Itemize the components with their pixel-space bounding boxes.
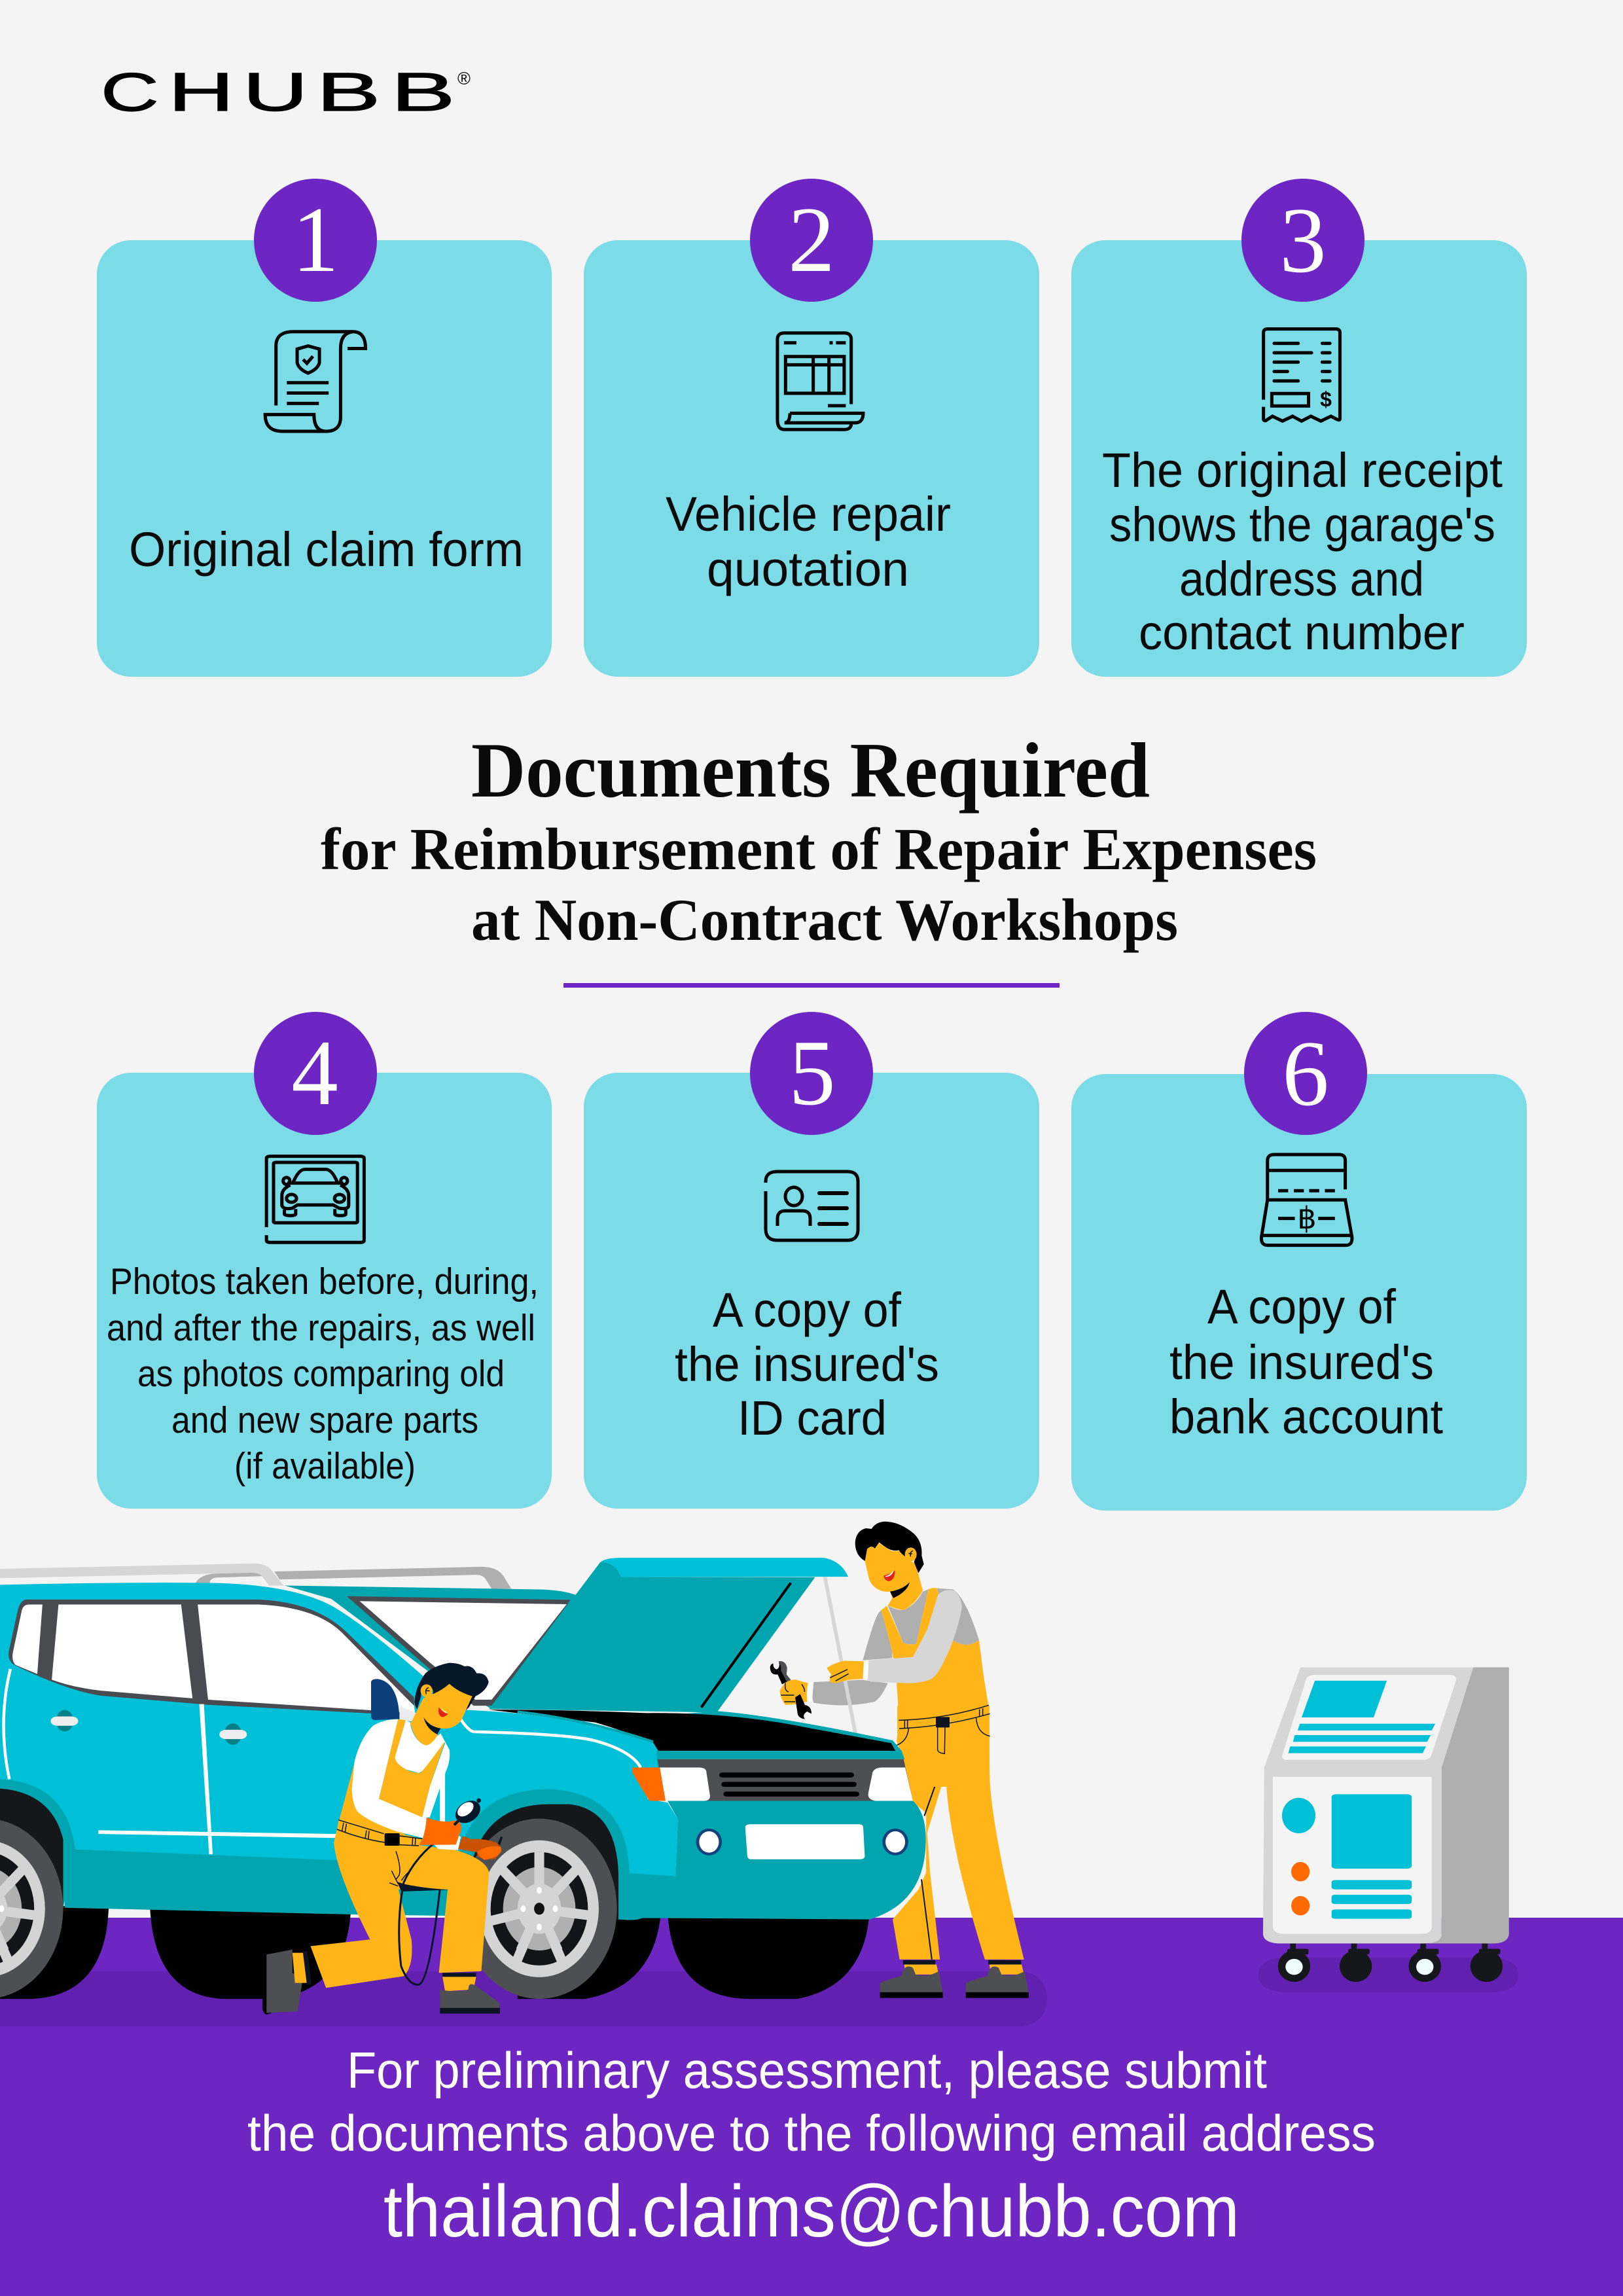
plate and fog lights xyxy=(745,1824,865,1859)
support rod xyxy=(823,1577,858,1738)
footer text: For preliminary assessment, please submit xyxy=(347,2041,1267,2099)
text: original claim form: Original claim form xyxy=(129,522,524,577)
logo: Chubb: C xyxy=(101,62,159,122)
casters xyxy=(1278,1943,1503,1982)
text: ID card copy: ID card xyxy=(738,1391,887,1445)
machine shadow xyxy=(1258,1958,1518,1992)
text: original receipt: shows the garage's xyxy=(1109,497,1495,552)
text: photos: and new spare parts xyxy=(171,1399,478,1441)
text: photos: Photos taken before, during, xyxy=(110,1261,539,1302)
number badge 1 xyxy=(254,179,377,302)
gloves xyxy=(434,1835,461,1850)
number badge 5 xyxy=(750,1012,873,1135)
text: ID card copy xyxy=(675,1283,939,1445)
ground shadow under car xyxy=(0,1971,1047,2026)
number badge 5: 5 xyxy=(789,1021,836,1124)
illustration: kneeling mechanic xyxy=(262,1663,503,2015)
logo: Chubb xyxy=(101,62,471,122)
bib xyxy=(379,1719,445,1818)
number badge 6 xyxy=(1244,1012,1367,1135)
machine panel xyxy=(1273,1777,1432,1934)
icon: receipt: $ xyxy=(1320,387,1332,411)
title: Documents Required xyxy=(471,726,1150,814)
text: ID card copy: A copy of xyxy=(713,1283,901,1337)
belt xyxy=(337,1820,422,1846)
legs and boots xyxy=(880,1706,1029,1998)
text: original receipt: The original receipt xyxy=(1102,443,1503,497)
icon: receipt xyxy=(1264,329,1340,421)
upper body and head xyxy=(337,1663,503,1892)
text: photos xyxy=(107,1261,539,1487)
text: photos: and after the repairs, as well xyxy=(107,1307,535,1349)
upper body and head xyxy=(770,1522,990,1787)
wheel arches xyxy=(0,1779,75,1908)
panel: document 4 xyxy=(97,1012,552,1509)
mirror xyxy=(371,1679,399,1720)
panel: document 6 xyxy=(1071,1012,1527,1511)
text: vehicle repair quotation: Vehicle repair xyxy=(666,487,951,541)
icon: insurance scroll xyxy=(265,332,366,431)
neck and face xyxy=(865,1543,923,1610)
machine body xyxy=(1442,1667,1509,1768)
icon: bank book xyxy=(1261,1155,1352,1246)
front end xyxy=(618,1801,926,1920)
logo: Chubb: U xyxy=(243,62,308,122)
wheels xyxy=(0,1819,63,1999)
number badge 3 xyxy=(1241,179,1364,302)
footer text: thailand.claims@chubb.com xyxy=(383,2170,1240,2252)
panel: document 1 xyxy=(97,179,552,677)
illustration: standing mechanic xyxy=(770,1522,1029,1998)
text: original receipt: address and xyxy=(1179,552,1424,606)
illustration: car xyxy=(0,1558,926,1999)
windows xyxy=(9,1600,414,1715)
number badge 3: 3 xyxy=(1279,188,1327,292)
body lines xyxy=(98,1704,336,1854)
number badge 6: 6 xyxy=(1282,1022,1329,1125)
text: vehicle repair quotation: quotation xyxy=(707,542,909,596)
title xyxy=(321,726,1317,988)
number badge 1: 1 xyxy=(292,188,339,291)
footer band xyxy=(0,1918,1623,2296)
text: bank account copy: bank account xyxy=(1169,1390,1443,1444)
text: bank account copy xyxy=(1169,1280,1443,1444)
number badge 2 xyxy=(750,179,873,302)
front arm xyxy=(867,1590,962,1683)
text: bank account copy: A copy of xyxy=(1207,1280,1396,1334)
text: original receipt: contact number xyxy=(1139,605,1465,660)
number badge 4 xyxy=(254,1012,377,1135)
headlights xyxy=(632,1768,666,1801)
footer text xyxy=(247,2041,1376,2252)
gauge xyxy=(454,1818,461,1825)
car body xyxy=(0,1583,678,1876)
hood xyxy=(489,1562,815,1712)
tyres xyxy=(0,1906,109,1999)
text: photos: (if available) xyxy=(234,1445,416,1487)
lower body band xyxy=(63,1848,629,1920)
number badge 4: 4 xyxy=(291,1021,338,1124)
wrench hand xyxy=(770,1661,791,1684)
door handles xyxy=(56,1710,73,1731)
text: bank account copy: the insured's xyxy=(1169,1335,1434,1390)
hair xyxy=(414,1663,489,1710)
panel: document 5 xyxy=(584,1012,1039,1509)
shirt xyxy=(352,1719,427,1838)
icon: repair quotation xyxy=(777,333,863,429)
logo: Chubb: ® xyxy=(457,69,471,88)
face xyxy=(410,1684,473,1746)
logo: Chubb: B xyxy=(317,62,380,122)
roof racks xyxy=(274,1567,511,1589)
number badge 2: 2 xyxy=(788,188,835,291)
hair xyxy=(855,1522,924,1573)
title: for Reimbursement of Repair Expenses xyxy=(321,816,1317,882)
footer text: the documents above to the following email address xyxy=(247,2104,1376,2162)
illustration: diagnostic machine xyxy=(1258,1667,1518,1992)
icon: ID card xyxy=(766,1172,858,1240)
grille slots xyxy=(719,1772,854,1778)
title: at Non-Contract Workshops xyxy=(471,887,1178,953)
machine screen xyxy=(1282,1675,1456,1760)
creases xyxy=(389,1851,410,1886)
text: photos: as photos comparing old xyxy=(137,1353,505,1395)
panel: document 2 xyxy=(584,179,1039,677)
engine bay xyxy=(621,1711,902,1751)
icon: car photo xyxy=(266,1157,364,1242)
text: vehicle repair quotation xyxy=(666,487,951,596)
logo: Chubb: H xyxy=(168,62,234,122)
icon: bank book: ฿ xyxy=(1297,1200,1317,1236)
text: ID card copy: the insured's xyxy=(675,1337,939,1391)
belt xyxy=(897,1705,990,1753)
roof and windshield xyxy=(285,1585,575,1709)
panel: document 3 xyxy=(1071,179,1527,677)
text: original receipt xyxy=(1102,443,1503,660)
logo: Chubb: B xyxy=(391,62,455,122)
legs, cable and boots xyxy=(262,1763,500,2015)
